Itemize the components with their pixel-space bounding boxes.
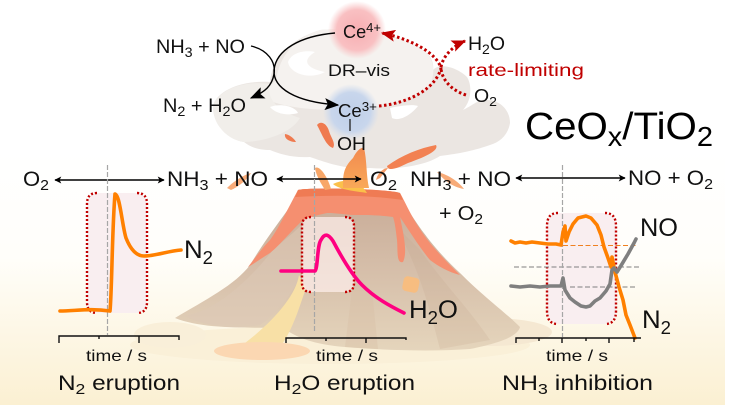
label: O2: 2 xyxy=(489,94,497,109)
label: Ce3+: Ce xyxy=(338,101,361,121)
label: O2: O xyxy=(23,168,39,191)
label: NH3 + NO: 3 xyxy=(443,177,452,194)
label: H2O: 2 xyxy=(428,308,438,328)
arrow: reactants to products xyxy=(251,46,274,98)
label: N2 + H2O products: O xyxy=(230,96,246,117)
axis label: time / s xyxy=(316,348,378,365)
label: N2 + H2O products: 2 xyxy=(177,104,185,119)
arrow: O2 to NH3+NO xyxy=(55,179,164,181)
label: NH3 + NO reactants: 3 xyxy=(185,45,193,60)
label: N2: N xyxy=(184,236,202,264)
caption: 2 xyxy=(292,381,301,398)
label: NO + O2: NO + O xyxy=(628,167,700,190)
label: NH3 + NO: + NO xyxy=(452,168,511,191)
label: Ce4+: 4+ xyxy=(366,20,381,35)
label: O2: 2 xyxy=(40,177,49,194)
label: NH3 + NO reactants: NH xyxy=(156,37,183,58)
time axis xyxy=(59,336,179,343)
bond line xyxy=(349,119,351,131)
N2 trace xyxy=(511,216,635,338)
label: N2 + H2O products: 2 xyxy=(223,104,230,119)
caption: O eruption xyxy=(301,372,415,395)
arrow: NH3+NO to NO+O2 xyxy=(516,177,625,179)
mountain xyxy=(175,195,520,350)
chart: NH3 inhibition xyxy=(502,165,678,398)
label: H2O: H xyxy=(409,296,427,324)
label: DR-vis: DR–vis xyxy=(328,61,390,80)
label: H2O: O xyxy=(438,296,458,324)
label: H2O: 2 xyxy=(482,42,490,57)
N2 trace xyxy=(60,194,181,311)
label: N2 + H2O products: N xyxy=(163,96,177,117)
mountain shading ridges xyxy=(185,222,303,327)
chart: N2 eruption xyxy=(58,165,213,398)
time guide xyxy=(562,165,564,337)
label: N2: 2 xyxy=(661,318,671,338)
title: CeO xyxy=(525,106,603,148)
label: + O2: 2 xyxy=(474,212,483,228)
label: Ce3+: 3+ xyxy=(362,99,377,114)
DR-vis cycle xyxy=(156,20,584,154)
caption: 3 xyxy=(538,381,548,398)
label: O2: O xyxy=(474,86,488,106)
red lava cap xyxy=(248,189,460,275)
label: NH3 + NO reactants: + NO xyxy=(193,37,245,58)
illustration: smoke cloud xyxy=(213,29,510,169)
label: H2O: H xyxy=(468,34,482,55)
NO trace xyxy=(511,239,636,307)
label: NO: NO xyxy=(640,214,678,242)
yellow lava stream xyxy=(245,275,306,347)
time axis xyxy=(286,338,406,343)
highlight window xyxy=(547,213,616,324)
gas switching row xyxy=(23,167,713,228)
axis label: time / s xyxy=(86,348,147,365)
chart: H2O eruption xyxy=(274,165,458,398)
arrow: Ce4+ to Ce3+ xyxy=(274,33,338,105)
label: NH3 + NO: NH xyxy=(410,168,440,191)
label: O2: O xyxy=(370,168,386,191)
label: NH3 + NO: + NO xyxy=(209,168,268,191)
label: N2: 2 xyxy=(203,248,213,268)
caption: eruption xyxy=(85,372,180,395)
time axis xyxy=(516,338,641,343)
title: /TiO xyxy=(622,106,697,148)
label: NH3 + NO: NH xyxy=(167,168,197,191)
time guide xyxy=(314,165,316,333)
label: NH3 + NO: 3 xyxy=(200,177,209,194)
arrow: O2 to H2O xyxy=(441,41,466,95)
title: x xyxy=(608,121,623,152)
label: + O2: + O xyxy=(439,203,472,225)
label: rate-limiting: rate-limiting xyxy=(468,60,584,80)
background gradient xyxy=(0,150,725,405)
title: 2 xyxy=(697,121,713,152)
Ce4+ glow xyxy=(328,1,386,59)
label: NO + O2: 2 xyxy=(704,176,713,193)
caption: 2 xyxy=(76,381,85,398)
illustration: volcano xyxy=(130,123,552,364)
H2O trace xyxy=(281,235,404,313)
caption: inhibition xyxy=(548,372,653,395)
time guide xyxy=(106,165,108,335)
arrow: rate-limiting Ce3+ to Ce4+ xyxy=(379,33,441,106)
caption: H xyxy=(274,372,289,395)
label: H2O: O xyxy=(490,34,505,55)
label: Ce4+: Ce xyxy=(343,22,366,42)
label: OH: OH xyxy=(337,134,366,154)
Ce3+ glow xyxy=(323,84,379,140)
caption: N xyxy=(58,372,73,395)
reference dashed lines xyxy=(563,244,636,246)
highlight window xyxy=(302,217,354,292)
ground glow xyxy=(130,326,530,364)
label: N2 + H2O products: + H xyxy=(185,96,223,117)
label: N2: N xyxy=(642,306,660,334)
arrow: NH3+NO to O2 xyxy=(277,178,361,180)
lava splashes xyxy=(343,148,369,188)
highlight window xyxy=(87,193,147,313)
axis label: time / s xyxy=(546,348,608,365)
caption: NH xyxy=(502,372,532,395)
label: O2: 2 xyxy=(388,177,397,194)
